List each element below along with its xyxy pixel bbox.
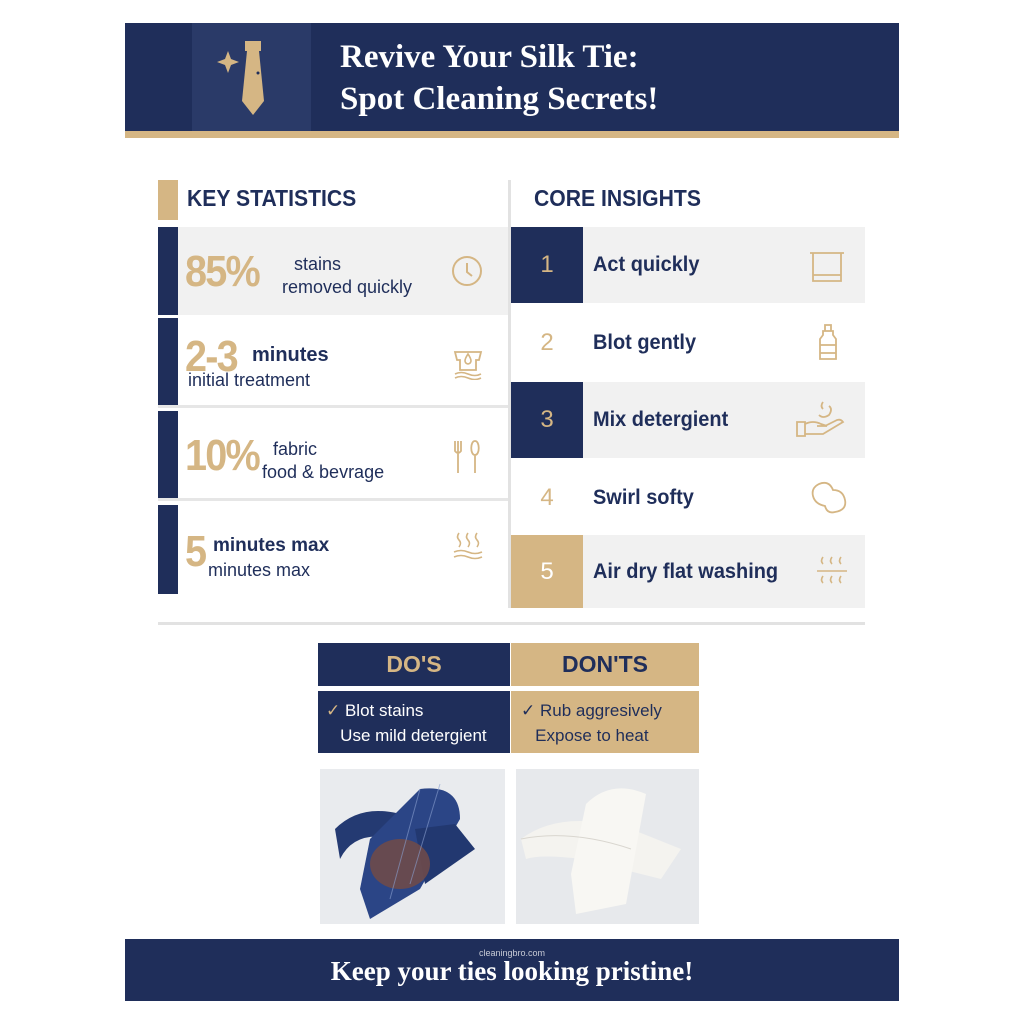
insight 1 bbox=[511, 227, 865, 303]
heading: core insights: CORE INSIGHTS bbox=[534, 185, 701, 211]
stat: 5 minutes max: 5 bbox=[185, 527, 205, 576]
stat: 2-3 minutes bbox=[158, 318, 508, 408]
stat: 85% bbox=[158, 227, 508, 315]
stat: 85%: removed quickly bbox=[282, 277, 412, 297]
stat: 10%: fabric bbox=[273, 439, 317, 459]
do's header bbox=[318, 643, 510, 686]
stat: 2-3 minutes: 2-3 bbox=[185, 332, 237, 381]
header banner bbox=[125, 23, 899, 131]
stat: 85%: stains bbox=[294, 254, 341, 274]
stat: 5 minutes max: minutes max bbox=[208, 560, 310, 580]
photo: white tie bbox=[516, 769, 699, 924]
panel: core insights bbox=[511, 227, 865, 608]
do's header: DO'S bbox=[386, 651, 442, 677]
don'ts header bbox=[511, 643, 699, 686]
heading: key statistics bbox=[158, 180, 356, 220]
footer banner bbox=[125, 939, 899, 1001]
don'ts list: Expose to heat bbox=[535, 726, 649, 745]
insight 5: Air dry flat washing bbox=[593, 560, 778, 582]
stat: 5 minutes max: minutes max bbox=[213, 535, 329, 556]
title: Spot Cleaning Secrets! bbox=[340, 81, 658, 117]
don'ts list: ✓ Rub aggresively bbox=[521, 701, 662, 720]
insight 2 bbox=[511, 305, 865, 380]
insight 1: 1 bbox=[540, 251, 554, 278]
footer text: Keep your ties looking pristine! bbox=[331, 956, 693, 986]
insight 5 bbox=[511, 535, 865, 608]
insight 4: 4 bbox=[540, 484, 554, 510]
panel: do's and don'ts bbox=[318, 643, 699, 753]
stat: 85%: 85% bbox=[185, 247, 259, 296]
insight 5: 5 bbox=[540, 558, 554, 584]
icon: tie bbox=[192, 23, 311, 131]
title bbox=[340, 39, 658, 117]
stat: 2-3 minutes: initial treatment bbox=[188, 370, 310, 390]
heading: key statistics: KEY STATISTICS bbox=[187, 185, 356, 211]
stat: 10% bbox=[158, 411, 508, 501]
panel: key statistics bbox=[158, 227, 508, 594]
photo: stained navy tie bbox=[320, 769, 505, 924]
insight 4: Swirl softy bbox=[593, 486, 694, 508]
title: Revive Your Silk Tie: bbox=[340, 39, 639, 75]
stat: 2-3 minutes: minutes bbox=[252, 344, 329, 366]
insight 1: Act quickly bbox=[593, 253, 699, 276]
do's list: Use mild detergient bbox=[340, 726, 487, 745]
insight 2: 2 bbox=[540, 328, 554, 356]
do's list: ✓ Blot stains bbox=[326, 701, 423, 720]
insight 4 bbox=[511, 460, 865, 535]
do's list bbox=[318, 691, 510, 753]
watermark: cleaningbro.com bbox=[479, 948, 545, 958]
insight 3 bbox=[511, 382, 865, 458]
stat: 10%: 10% bbox=[185, 431, 259, 480]
don'ts list bbox=[511, 691, 699, 753]
stat: 10%: food & bevrage bbox=[262, 462, 384, 482]
don'ts header: DON'TS bbox=[562, 651, 648, 677]
insight 3: 3 bbox=[540, 406, 554, 433]
insight 2: Blot gently bbox=[593, 330, 696, 354]
insight 3: Mix detergient bbox=[593, 408, 728, 431]
stat: 5 minutes max bbox=[158, 505, 508, 594]
